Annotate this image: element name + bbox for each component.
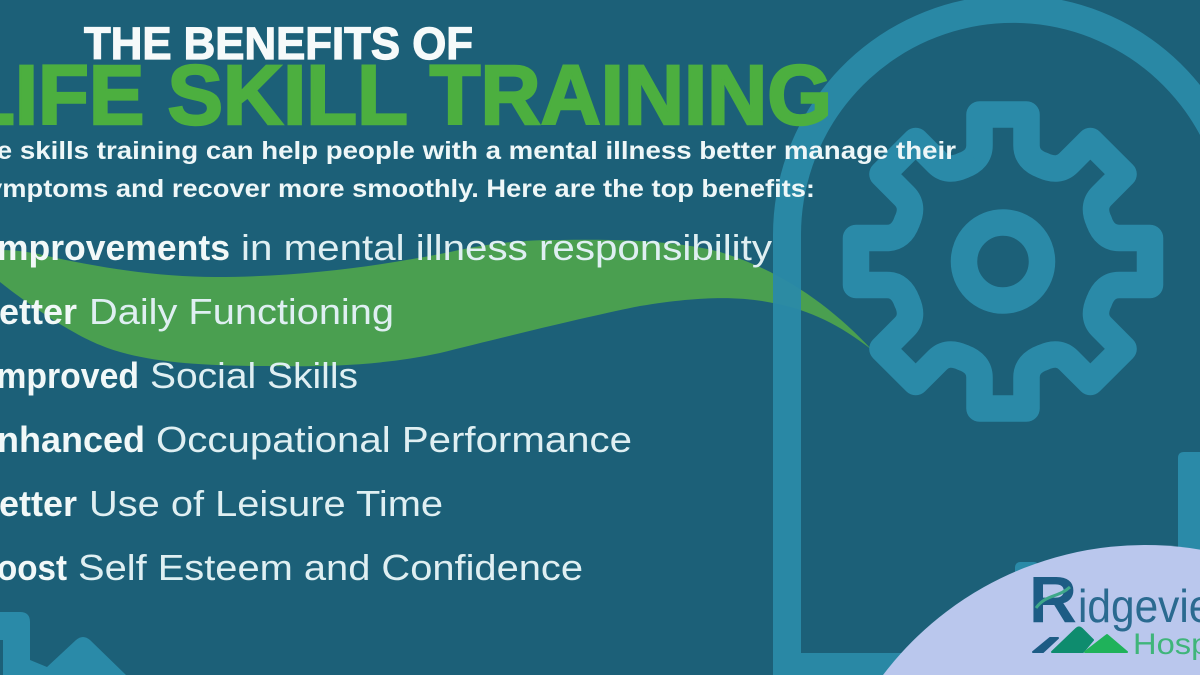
- intro text: [0, 137, 956, 203]
- benefit 5: Use of Leisure Time: [89, 483, 443, 524]
- logo badge: [883, 545, 1200, 675]
- benefit 4: Occupational Performance: [156, 419, 632, 460]
- benefit 6: Self Esteem and Confidence: [78, 547, 583, 588]
- benefits list: [0, 227, 772, 588]
- benefit 1: in mental illness responsibility: [241, 227, 772, 268]
- logo: Ridgeview Hospital: [1029, 562, 1200, 661]
- benefit 4: [0, 419, 632, 460]
- icon: partial gear bottom left: [0, 612, 126, 675]
- green wave: [0, 240, 872, 366]
- icon: large gear: [856, 114, 1150, 408]
- right edge shape: [1178, 452, 1200, 560]
- arch outline: [773, 0, 1200, 675]
- benefit 3: [0, 355, 358, 396]
- title: THE BENEFITS OF: [84, 18, 473, 69]
- benefit 1: [0, 227, 772, 268]
- benefit 3: Social Skills: [150, 355, 358, 396]
- benefit 2: Daily Functioning: [89, 291, 394, 332]
- small shape behind logo badge: [1015, 562, 1039, 582]
- logo: Ridgeview Hospital: R: [1029, 562, 1077, 636]
